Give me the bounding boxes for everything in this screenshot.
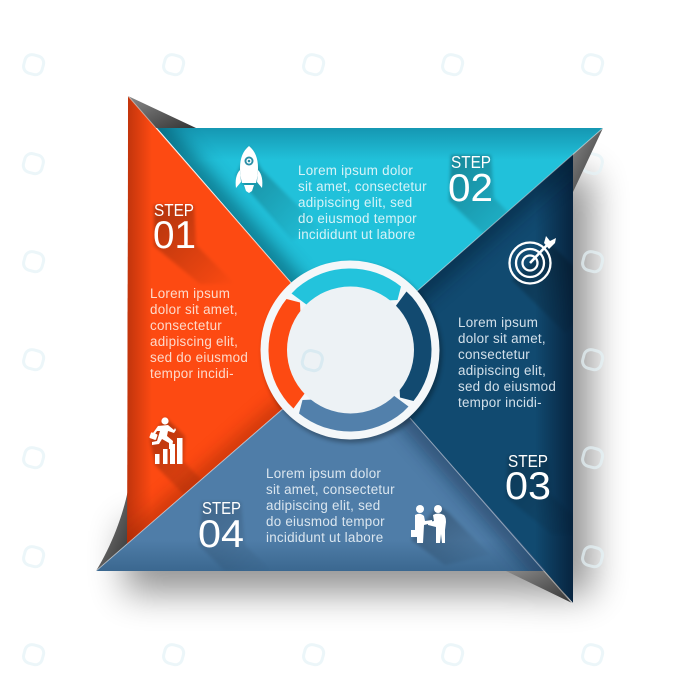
label: step 03: STEP <box>508 451 548 471</box>
long shadow: step 03 label <box>506 456 552 520</box>
folded corners <box>96 96 603 603</box>
icon: handshake <box>411 505 446 543</box>
long shadow: step 02 label <box>448 154 508 234</box>
number: 01: 01 <box>153 214 196 257</box>
arrow segment: blue <box>299 395 408 432</box>
text: step 04 <box>198 466 395 556</box>
icon: rocket <box>236 146 262 193</box>
long shadow: target <box>512 246 573 320</box>
body: step 03: tempor incidi- <box>458 395 542 410</box>
outer white ring <box>260 260 440 440</box>
body: step 01: adipiscing elit, <box>150 334 238 349</box>
body: step 01: sed do eiusmod <box>150 350 248 365</box>
body: step 02: do eiusmod tempor <box>298 211 417 226</box>
body: step 02: adipiscing elit, sed <box>298 195 412 210</box>
panel: step 02 teal <box>157 128 603 291</box>
icon: target <box>510 236 556 284</box>
text: step 02 <box>298 152 493 242</box>
circle shadow <box>262 263 442 443</box>
number: 02: 02 <box>448 167 493 210</box>
watermark pattern <box>22 53 604 666</box>
text: step 01 <box>150 200 248 381</box>
body: step 01: Lorem ipsum <box>150 286 230 301</box>
panel: step 03 navy <box>409 154 573 603</box>
arrow segment: orange <box>268 299 305 408</box>
panel: step 01 orange <box>127 96 291 544</box>
long shadow: step 04 label <box>199 501 249 568</box>
watermark pattern right column <box>581 152 604 568</box>
label: step 02: STEP <box>451 152 491 172</box>
icon: runner and bars <box>149 417 182 464</box>
panel seams <box>96 96 603 603</box>
center circle <box>260 260 442 443</box>
body: step 01: consectetur <box>150 318 222 333</box>
body: step 02: Lorem ipsum dolor <box>298 163 413 178</box>
inner disc <box>287 286 414 414</box>
long shadow: handshake <box>411 504 481 564</box>
body: step 01: dolor sit amet, <box>150 302 238 317</box>
label: step 04: STEP <box>202 498 241 518</box>
arrow segment: teal <box>292 268 401 305</box>
panel: step 04 blue <box>96 409 546 571</box>
body: step 04: adipiscing elit, sed <box>266 498 380 513</box>
long shadow: runner <box>148 416 201 494</box>
arrow segment: navy <box>395 292 432 401</box>
body: step 03: Lorem ipsum <box>458 315 538 330</box>
drop shadow behind square <box>125 175 592 595</box>
body: step 02: sit amet, consectetur <box>298 179 427 194</box>
body: step 04: incididunt ut labore <box>266 530 383 545</box>
body: step 04: sit amet, consectetur <box>266 482 395 497</box>
body: step 03: adipiscing elit, <box>458 363 546 378</box>
text: step 03 <box>458 315 556 508</box>
long shadow: step 01 label <box>154 205 235 284</box>
label: step 01: STEP <box>154 200 194 220</box>
body: step 02: incididunt ut labore <box>298 227 415 242</box>
watermark on disc <box>301 349 324 372</box>
body: step 03: consectetur <box>458 347 530 362</box>
body: step 01: tempor incidi- <box>150 366 234 381</box>
number: 04: 04 <box>198 513 244 556</box>
body: step 04: do eiusmod tempor <box>266 514 385 529</box>
body: step 03: dolor sit amet, <box>458 331 546 346</box>
long shadow: rocket <box>235 158 312 238</box>
body: step 04: Lorem ipsum dolor <box>266 466 381 481</box>
body: step 03: sed do eiusmod <box>458 379 556 394</box>
number: 03: 03 <box>505 465 551 508</box>
